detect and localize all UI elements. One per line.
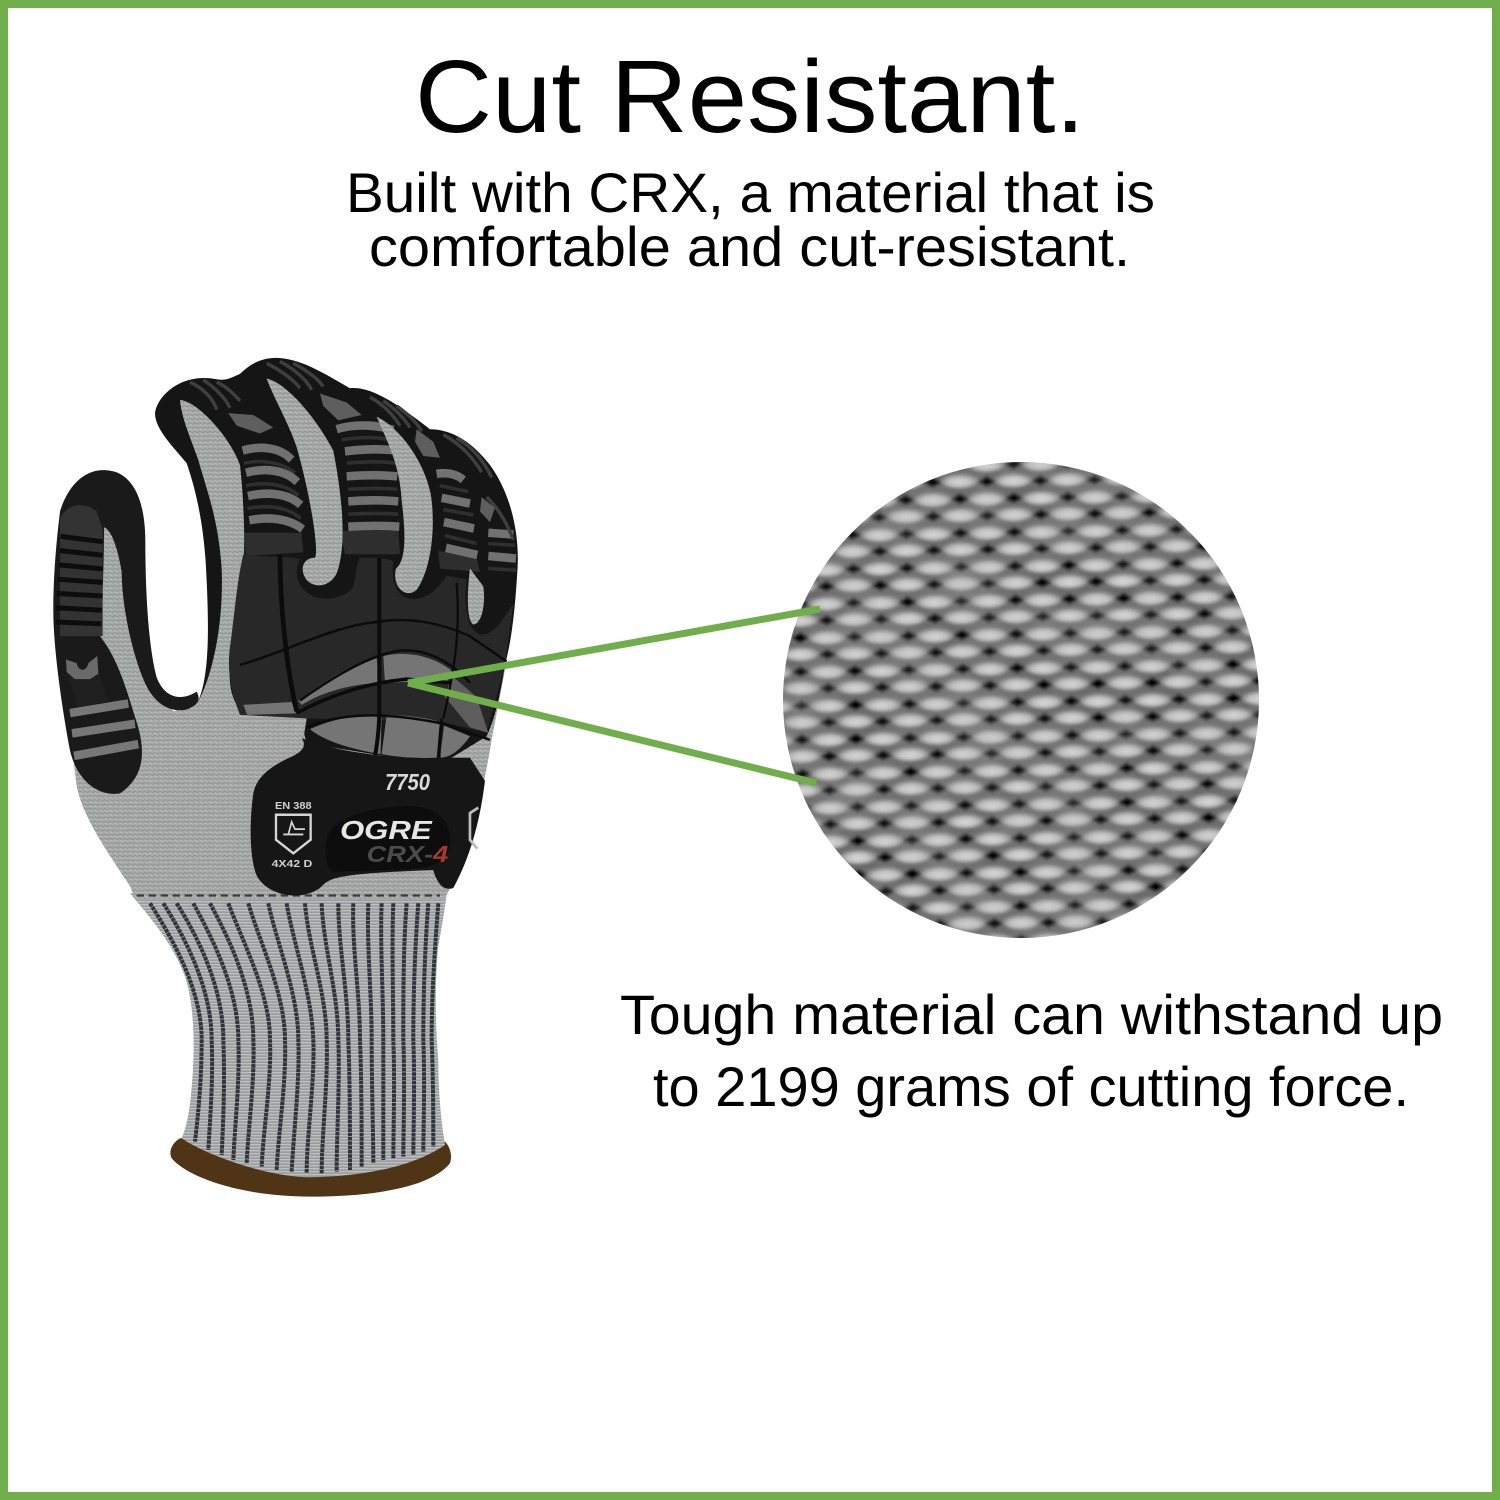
model number: 7750 (385, 768, 430, 795)
side shield fragment (470, 808, 478, 849)
brand logo: OGRE (340, 816, 433, 845)
EN 388 rating shield: 4X42 D (272, 859, 312, 870)
caption: to 2199 grams of cutting force. (653, 1055, 1409, 1118)
ring finger knit strip (377, 417, 433, 593)
thumb pad (53, 470, 199, 794)
subtitle (346, 161, 1155, 278)
stitching line (137, 892, 440, 898)
knit body (57, 522, 507, 899)
subtitle: Built with CRX, a material that is (346, 161, 1155, 224)
model logo: CRX-4 (367, 840, 449, 867)
finger impact ribs (190, 361, 516, 572)
glove photo illustration (53, 358, 518, 1197)
black finger and palm silhouette (155, 358, 518, 765)
magnified fabric circle (770, 450, 1270, 950)
EN 388 rating shield (272, 801, 312, 870)
index finger knit strip (173, 400, 307, 740)
little finger knit strip (468, 568, 484, 625)
green callout lines (408, 609, 820, 783)
lower badge panel (251, 738, 485, 896)
title: Cut Resistant. (415, 39, 1085, 154)
caption (620, 983, 1443, 1118)
brown hem (170, 1138, 451, 1197)
cuff (130, 893, 451, 1197)
EN 388 rating shield: EN 388 (275, 801, 312, 812)
subtitle: comfortable and cut-resistant. (369, 215, 1130, 278)
palm panels (229, 554, 513, 808)
middle finger knit strip (267, 379, 343, 585)
caption: Tough material can withstand up (620, 983, 1443, 1046)
ribbed knit (130, 893, 447, 1177)
